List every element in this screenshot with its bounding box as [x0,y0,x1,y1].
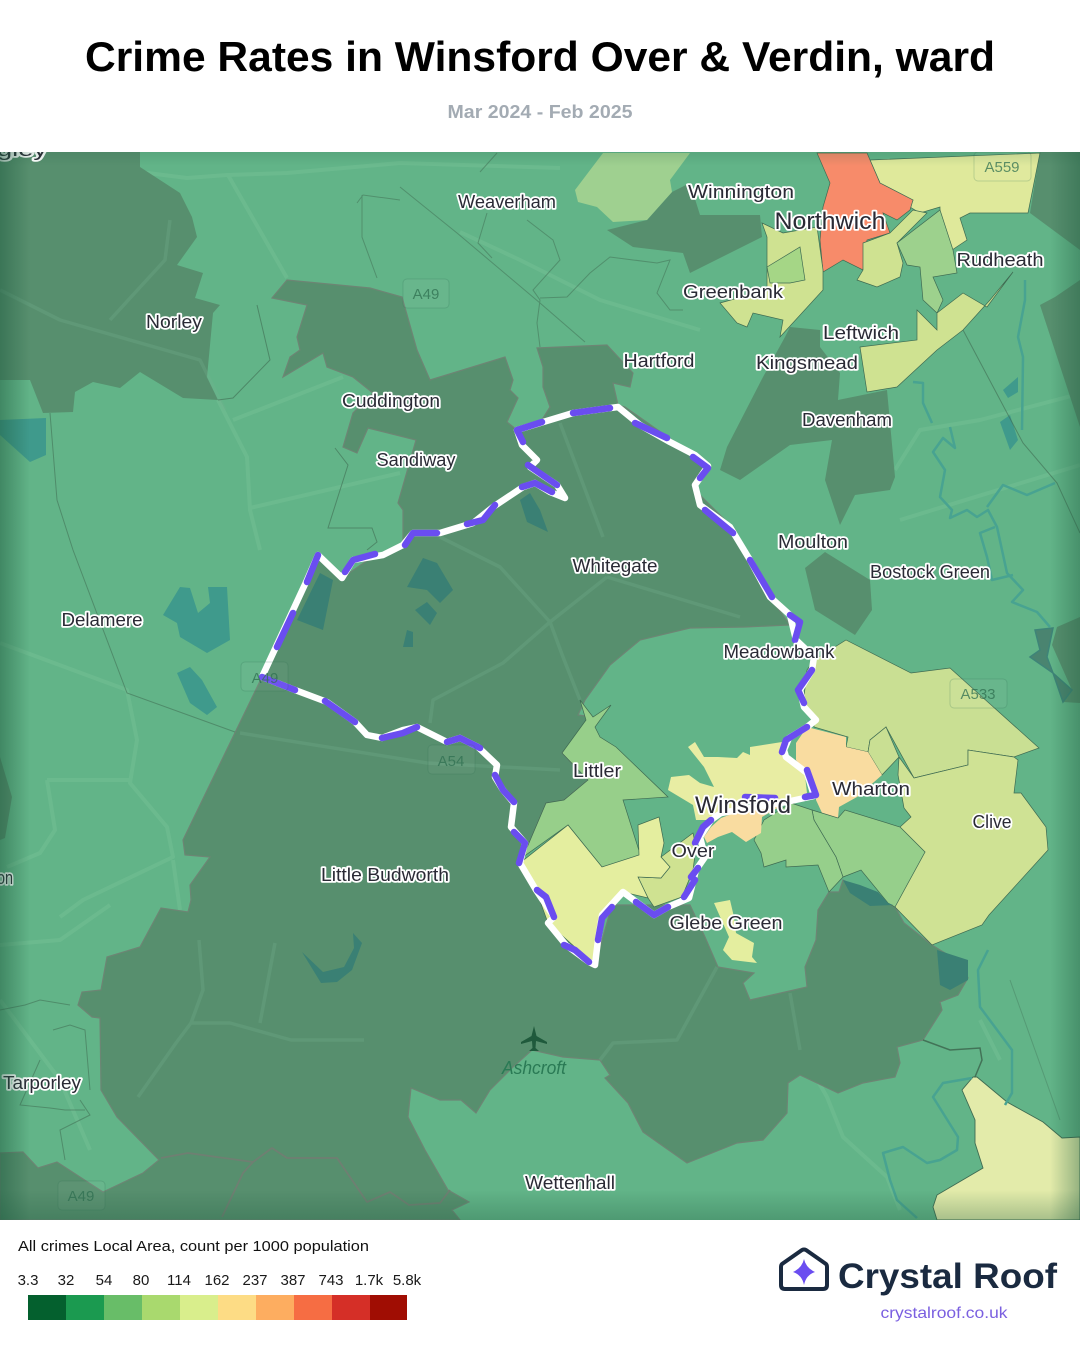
ward boundary: purple dashes [262,408,816,962]
area: Greenbank inner green [767,247,805,283]
legend scale values: 1.7k [355,1272,384,1289]
water bodies [0,280,1055,1218]
area: Wharton (orange) [796,727,882,818]
place labels: Over [672,841,714,861]
area: south-east Winsford [754,803,843,892]
place labels: Whitegate [572,556,658,576]
map panel [0,140,1080,1220]
place labels: Hartford [624,351,694,371]
legend scale values: 387 [280,1272,306,1289]
legend scale values: 237 [242,1272,268,1289]
dark low-crime zone: Norley [0,152,220,413]
map edge vignette [0,152,1080,1220]
area: Winsford south (orange) [704,806,777,843]
ward boundary: white base line [262,407,816,965]
place labels: Greenbank [683,282,784,302]
area: small east of Wharton [868,727,899,775]
road label: A49 south: A49 [68,1188,94,1205]
area: Over (yellow-green) [638,833,696,907]
dark zone: east wedge [1040,280,1080,427]
legend scale values: 54 [96,1272,112,1289]
area: south-west of Winsford (pale yellow) [520,817,670,965]
legend scale values: 80 [133,1272,149,1289]
legend scale values: 162 [204,1272,230,1289]
area: Greenbank [720,223,823,337]
area: Glebe Green (yellow) [714,900,757,963]
logo url: crystalroof.co.uk [880,1305,1009,1322]
airport label: Ashcroft: Ashcroft [501,1058,567,1078]
area: east of Northwich (yellow-green) [857,210,927,287]
place labels: Sandiway [376,450,456,470]
dark low-crime zone: left edge [0,757,12,840]
place labels: Clive [972,812,1012,832]
map base: mid green area [0,152,1080,1220]
place labels: Little Budworth [321,865,449,885]
dark zone: north-east edge [1030,152,1080,250]
place labels: Littler [573,761,621,781]
road label: A54 [428,745,475,774]
place labels: Rudheath [956,250,1044,270]
area: Leftwich [860,272,1013,392]
dark zone: Winnington [607,183,762,273]
area: south-east corner (pale yellow) [933,1077,1080,1220]
place labels: Moulton [778,532,848,552]
legend title: All crimes Local Area, count per 1000 population [18,1238,369,1255]
area: east of Northwich (green) [897,210,957,313]
map roads on light ground [0,163,1080,1210]
legend [18,1238,422,1320]
legend scale values: 3.3 [18,1272,38,1289]
area: Clive [895,750,1048,945]
icon: house with star [781,1250,827,1289]
road label: A49 west [241,662,288,691]
logo: Crystal Roof [781,1250,1057,1322]
place labels: Wharton [832,779,910,799]
legend scale values: 5.8k [393,1272,422,1289]
logo wordmark: Crystal Roof [838,1257,1057,1296]
place labels: Delamere [62,610,142,630]
road label: A533 [950,679,1007,708]
place labels [0,140,1044,1193]
legend scale values: 32 [58,1272,74,1289]
dark zone: Moulton [805,552,872,635]
place labels: Glebe Green [670,913,782,933]
icon: airport plane [521,1026,547,1051]
road label: A49 north [403,279,449,308]
legend scale values: 743 [318,1272,344,1289]
legend colour bar [28,1295,407,1320]
legend scale values: 114 [167,1272,191,1289]
road label: A54: A54 [438,753,464,770]
place labels: Bostock Green [870,562,990,582]
subtitle: date range: Mar 2024 - Feb 2025 [448,102,632,122]
place labels: Weaverham [458,192,556,212]
place labels: Cuddington [342,391,440,411]
road label: A559 [974,152,1031,181]
thin boundary lines [0,153,1080,1160]
area: south of Wharton [812,810,925,907]
place labels: Leftwich [823,323,899,343]
place labels: Tarporley [3,1073,81,1093]
place labels: Wettenhall [525,1173,615,1193]
place labels: Meadowbank [724,642,836,662]
road label: A49 west: A49 [252,670,278,687]
road label: A533: A533 [960,686,996,703]
road label: A49 north: A49 [413,286,439,303]
road label: A559: A559 [984,159,1020,176]
title: Crime Rates in Winsford Over & Verdin, ward [85,33,995,80]
place labels: Davenham [802,410,892,430]
place labels: Winnington [688,182,794,202]
area: Littler [523,700,668,867]
dark zone: Davenham [720,327,895,525]
road label: A49 south [58,1181,105,1210]
dark low-crime zone: central and southern ward area [0,280,968,1220]
roads on dark ground [0,220,800,1097]
area: Northwich centre (red-orange) [817,153,913,272]
area: north-east of Northwich (yellow) [870,153,1040,250]
place labels: Norley [146,312,202,332]
area: Meadowbank east [804,640,1039,778]
light green area: top north of Winnington [575,153,690,222]
legend scale values [18,1272,422,1289]
dark zone: east edge lower [1052,617,1080,703]
place labels: Northwich [774,208,886,235]
parish boundary in dark zone [161,1148,450,1217]
area: Winsford centre (yellow) [668,742,807,820]
wetland: east edge [1030,628,1072,702]
place labels: Winsford [695,792,791,819]
place labels: Kingsmead [756,353,858,373]
